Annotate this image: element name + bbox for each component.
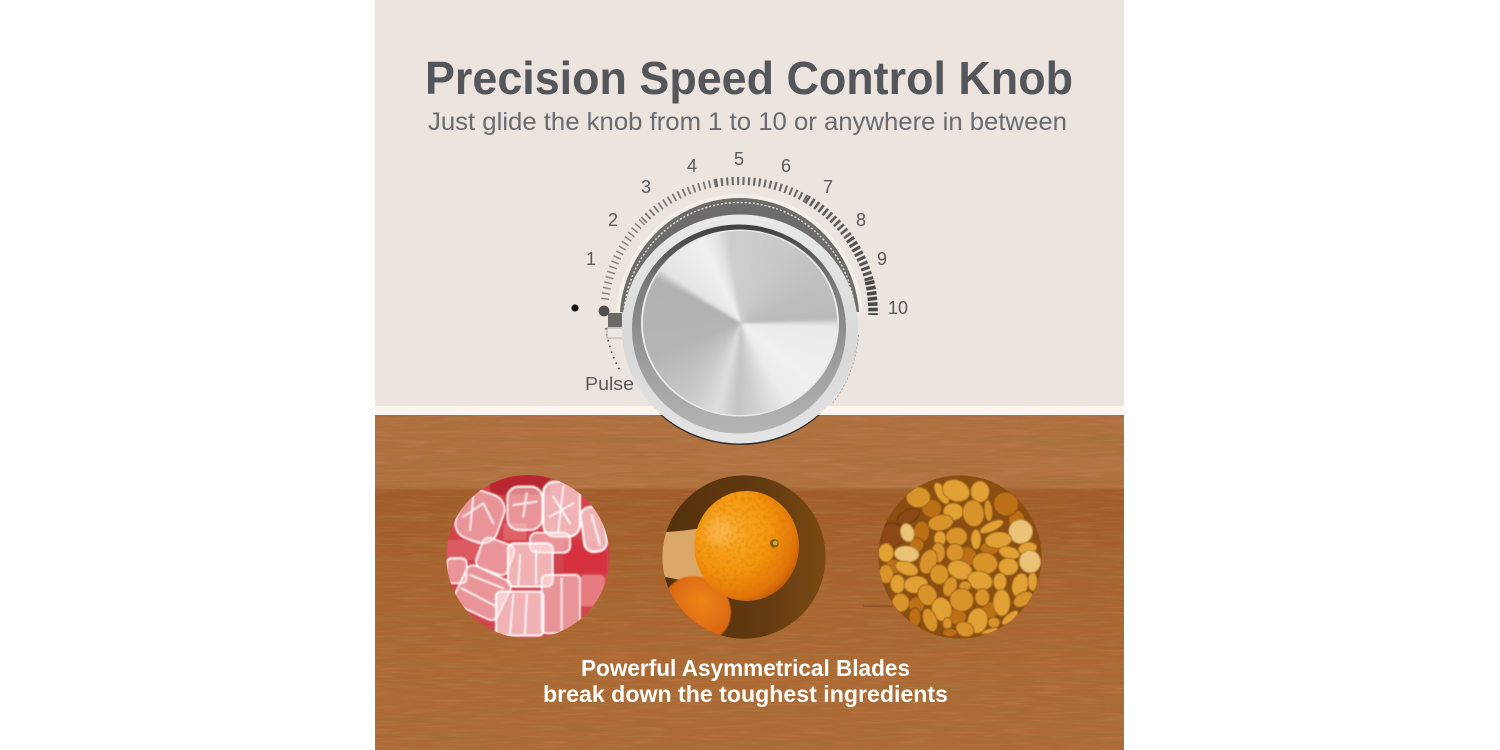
shadowed backdrop (660, 473, 830, 643)
small orange (668, 576, 732, 636)
scale numbers: 10 (888, 298, 908, 318)
brushed metal knob face (643, 231, 837, 415)
caption line 1: Powerful Asymmetrical Blades (581, 655, 910, 681)
caption line 2: break down the toughest ingredients (543, 681, 948, 707)
pulse dotted arc (606, 328, 621, 372)
scale numbers: 3 (641, 177, 651, 197)
ice picture (447, 475, 608, 636)
outer bezel (622, 214, 858, 445)
subtitle: Just glide the knob from 1 to 10 or anywhere in between (428, 108, 1067, 136)
scale numbers: 4 (687, 156, 697, 176)
speed knob (607, 194, 864, 450)
ice base (443, 473, 613, 640)
photo: peanuts (877, 473, 1043, 643)
scale numbers: 8 (856, 210, 866, 230)
photo: oranges (662, 475, 826, 639)
scale numbers: 7 (823, 177, 833, 197)
pointer (607, 313, 626, 338)
off dot (571, 304, 579, 312)
knurled ring (620, 198, 860, 312)
scale numbers: 1 (586, 249, 596, 269)
right shadow (732, 600, 814, 639)
panel: beige background (375, 0, 1124, 406)
pulse label: Pulse (585, 374, 634, 394)
photo: ice (443, 473, 613, 640)
caption (543, 655, 948, 707)
speed dial scale (571, 149, 908, 394)
white divider strip (375, 406, 1124, 415)
sunlit stone patch (662, 528, 704, 580)
knob halo (616, 194, 863, 312)
scale ticks (605, 181, 873, 315)
scale numbers (586, 149, 908, 318)
scale numbers: 2 (608, 210, 618, 230)
zero dot (599, 306, 609, 316)
panel: wood board (375, 415, 1124, 750)
main orange (694, 491, 799, 601)
scale numbers: 5 (734, 149, 744, 169)
orange stem (770, 539, 779, 548)
scale numbers: 6 (781, 156, 791, 176)
title: Precision Speed Control Knob (425, 52, 1073, 104)
scale numbers: 9 (877, 249, 887, 269)
dark inner ring (632, 224, 846, 434)
peanut base (877, 473, 1043, 643)
metal rim (641, 230, 839, 416)
peanuts (877, 476, 1043, 639)
